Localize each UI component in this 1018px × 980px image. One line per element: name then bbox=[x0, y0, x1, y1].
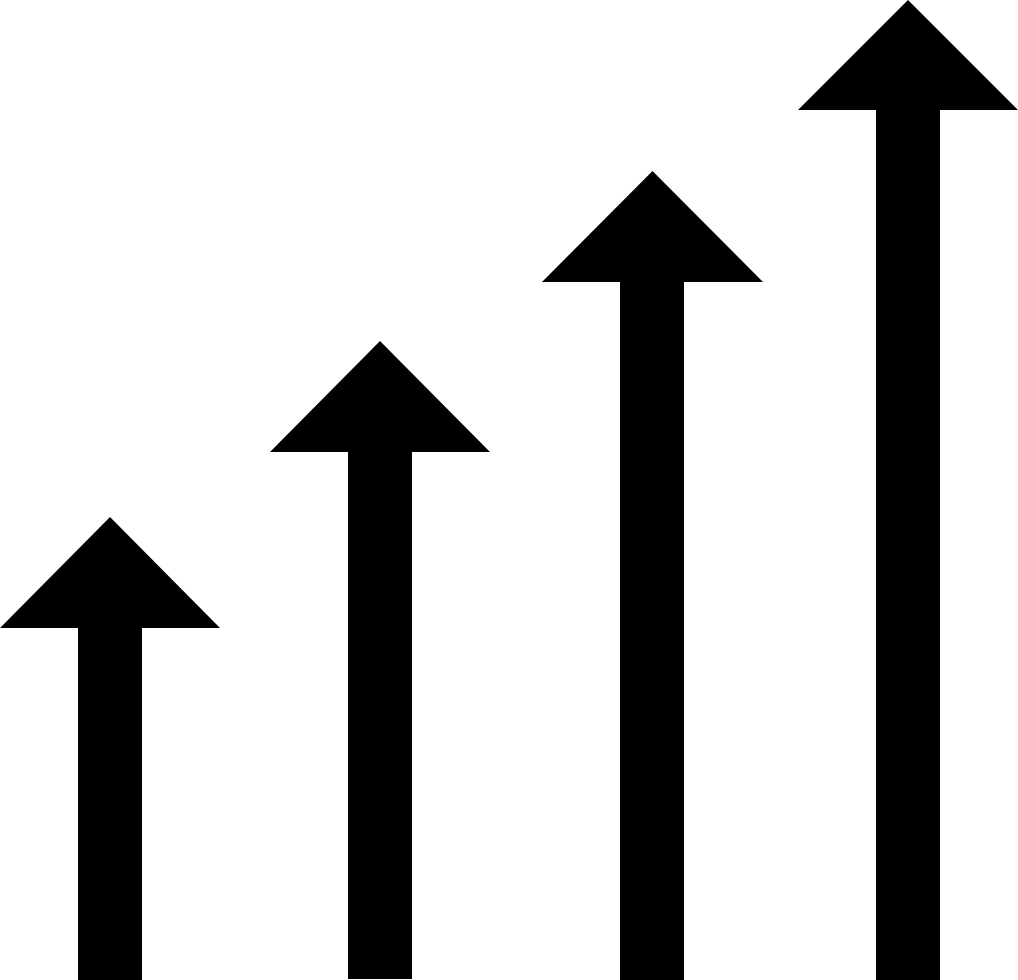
arrow 4 bbox=[798, 0, 1018, 980]
arrow 3 bbox=[542, 171, 763, 980]
arrow 1 bbox=[0, 517, 220, 980]
arrow 2 bbox=[270, 341, 490, 979]
